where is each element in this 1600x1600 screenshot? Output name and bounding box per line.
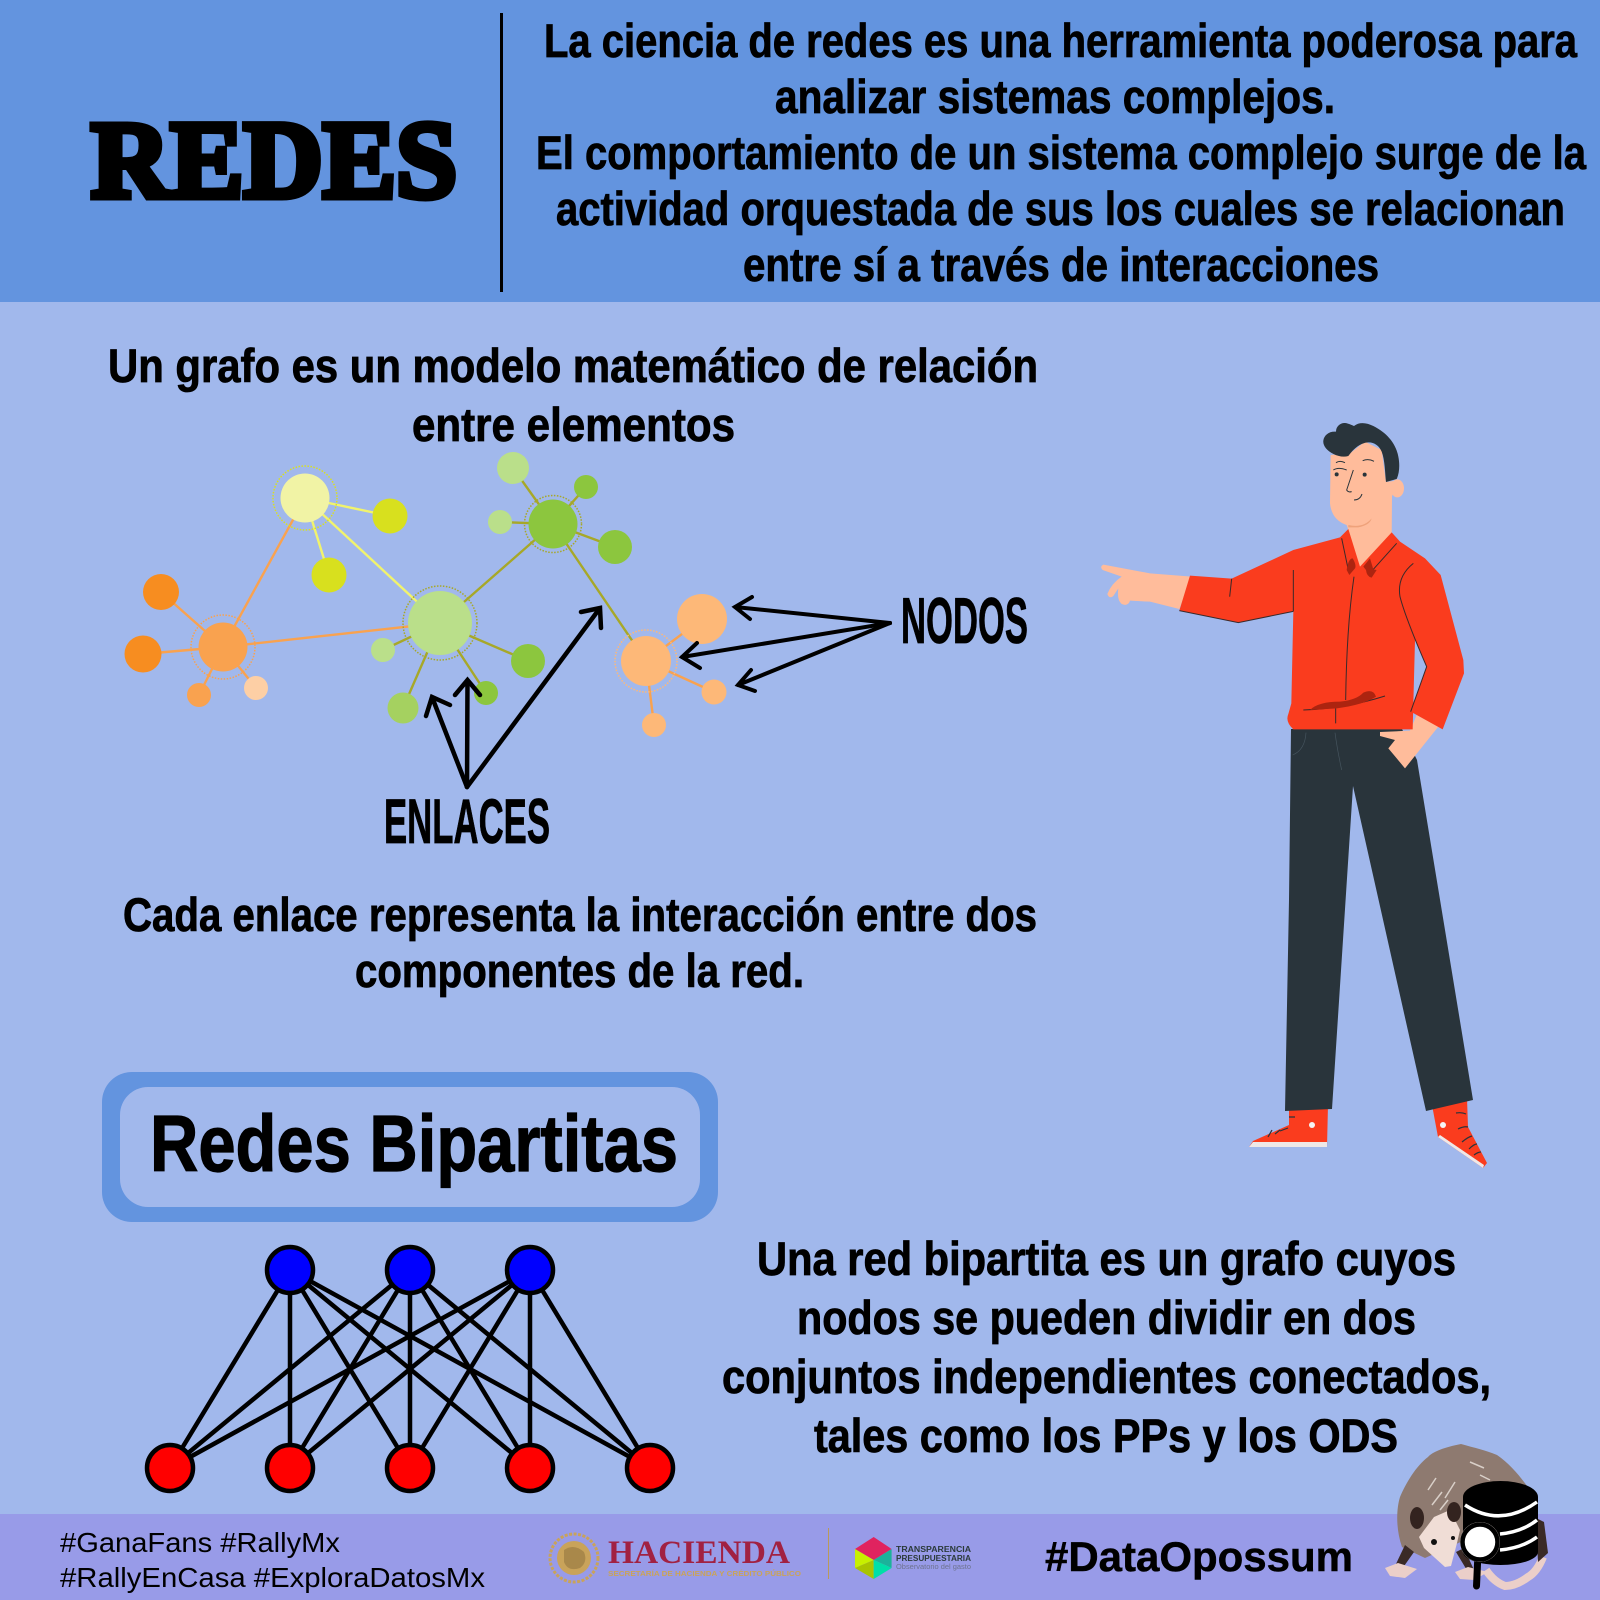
opossum tail <box>1486 1557 1543 1586</box>
opossum fur marks <box>1428 1462 1490 1510</box>
opossum eyes <box>1431 1536 1455 1545</box>
illustration: man pointing <box>1101 423 1487 1168</box>
opossum face <box>1419 1510 1460 1567</box>
footer hashtags: #RallyEnCasa #ExploraDatosMx <box>60 1562 485 1593</box>
opossum legs and paws <box>1385 1545 1488 1580</box>
pointing arm hand <box>1101 565 1192 609</box>
header description text <box>536 14 1587 291</box>
link explanation text <box>123 888 1037 997</box>
lower hand <box>1380 715 1438 768</box>
header description text: entre sí a través de interacciones <box>743 238 1379 291</box>
shirt <box>1179 529 1464 729</box>
shirt details <box>1179 538 1427 723</box>
opossum body <box>1397 1444 1530 1558</box>
arrows to nodes <box>682 597 890 691</box>
title: REDES: REDES <box>91 99 457 221</box>
man upper body <box>1101 423 1464 770</box>
link explanation text: Cada enlace representa la interacción entre dos <box>123 888 1037 941</box>
heading box: Redes Bipartitas <box>102 1072 718 1222</box>
shirt shadow <box>1310 558 1377 710</box>
graph definition text: entre elementos <box>412 398 735 451</box>
hashtag: DataOpossum: #DataOpossum <box>1045 1533 1353 1580</box>
magnifier icon <box>1460 1522 1500 1586</box>
logo: Transparencia Presupuestaria <box>855 1537 971 1579</box>
link explanation text: componentes de la red. <box>355 944 804 997</box>
logo: Transparencia Presupuestaria: TRANSPARENCIA <box>896 1545 971 1554</box>
header description text: analizar sistemas complejos. <box>775 70 1335 123</box>
graph definition text <box>108 339 1038 451</box>
face features <box>1333 460 1374 500</box>
graph definition text: Un grafo es un modelo matemático de relación <box>108 339 1038 392</box>
logo: Transparencia Presupuestaria: Observatorio del gasto <box>896 1562 971 1571</box>
bipartite graph <box>147 1247 673 1491</box>
seal <box>550 1534 598 1582</box>
header band <box>0 0 1600 302</box>
database icon <box>1463 1481 1538 1565</box>
logo: Hacienda <box>550 1528 829 1582</box>
bipartite definition text: conjuntos independientes conectados, <box>722 1350 1491 1403</box>
ear <box>1391 479 1404 497</box>
label: NODOS: NODOS <box>901 584 1028 657</box>
bipartite definition text: Una red bipartita es un grafo cuyos <box>757 1232 1456 1285</box>
bipartite edges <box>170 1270 650 1468</box>
network nodes <box>124 452 727 737</box>
arrows to links <box>426 608 601 787</box>
footer hashtags: #GanaFans #RallyMx <box>60 1527 340 1558</box>
red nodes <box>147 1445 673 1491</box>
node rings <box>191 466 677 692</box>
label: ENLACES: ENLACES <box>384 787 550 857</box>
opossum mascot with database <box>1385 1444 1548 1586</box>
network diagram <box>124 452 727 737</box>
logo: Hacienda: SECRETARÍA DE HACIENDA Y CRÉDITO PÚBLICO <box>608 1569 801 1578</box>
blue nodes <box>267 1247 553 1293</box>
bipartite definition text: tales como los PPs y los ODS <box>814 1409 1398 1462</box>
hexagon mark <box>855 1537 892 1579</box>
opossum ears <box>1410 1507 1424 1529</box>
opossum back leg <box>1536 1518 1548 1562</box>
footer hashtags <box>60 1527 485 1593</box>
bipartite definition text <box>722 1232 1491 1462</box>
head and neck <box>1330 442 1397 568</box>
logo: Hacienda: HACIENDA <box>608 1535 790 1571</box>
network links <box>143 468 714 725</box>
pants pocket detail <box>1293 733 1342 770</box>
logo: Transparencia Presupuestaria: PRESUPUESTARIA <box>896 1554 971 1563</box>
hair <box>1323 423 1399 482</box>
man shoes <box>1249 1098 1487 1168</box>
footer band <box>0 1514 1600 1600</box>
bipartite definition text: nodos se pueden dividir en dos <box>797 1291 1416 1344</box>
man legs and pants <box>1285 729 1473 1111</box>
heading box: Redes Bipartitas: Redes Bipartitas <box>150 1099 678 1188</box>
